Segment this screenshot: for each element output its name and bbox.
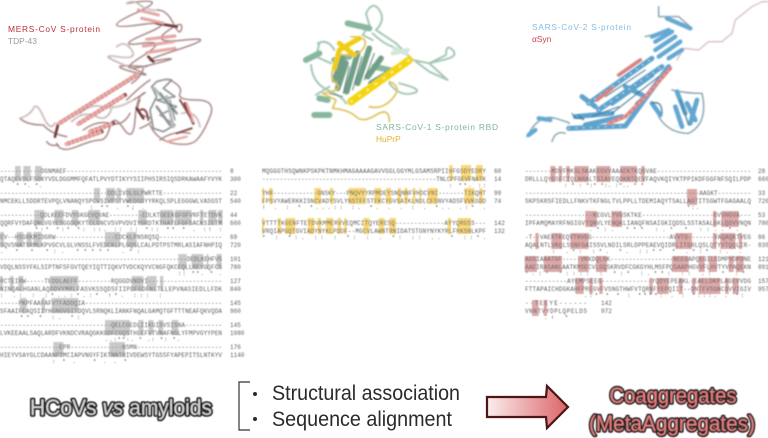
sequence alignment: MERS-CoV S-protein vs TDP-43: 145 <box>230 322 241 329</box>
sequence alignment: MERS-CoV S-protein vs TDP-43: SFAAIFEAQSIIYHGNGVGITDQVLSRNQKLIANKFNQALGAMQTGFTTTNEAFQKVQDA <box>0 308 222 315</box>
sequence alignment: SARS-CoV-2 S-protein vs alpha-synuclein: 86 <box>758 234 766 241</box>
sequence alignment: MERS-CoV S-protein vs TDP-43: : ** . *; . <box>90 205 145 211</box>
sequence alignment: SARS-CoV-1 S-protein RBD vs HuPrP: * : *:. :: : *: : . *: :: .. * ::*. <box>262 235 486 241</box>
sequence alignment: MERS-CoV S-protein vs TDP-43: ** * :. *: <box>20 315 80 321</box>
sequence alignment: SARS-CoV-1 S-protein RBD vs HuPrP: 99 <box>494 190 502 197</box>
sequence alignment: SARS-CoV-2 S-protein vs alpha-synuclein: --TEEYE------ <box>525 300 587 307</box>
sequence alignment: MERS-CoV S-protein vs TDP-43: . * * *:. ***** .*: <box>0 249 140 255</box>
sequence alignment: SARS-CoV-2 S-protein vs alpha-synuclein: -------MDVFMKGLSKAKEGVVAAAEKTKQGVAE------------------------- <box>525 168 751 175</box>
sequence alignment: MERS-CoV S-protein vs TDP-43: HIEYVSAYGLCDAANPTMCIAPVNGYFIKTNNTRIVDEWSYTGSSFYAPEPITSLNTKYV <box>0 352 222 359</box>
sequence alignment: SARS-CoV-2 S-protein vs alpha-synuclein: FTTAPAICHDGKAHFPREGVFVSNGTHWFVTQRNFYEPQIIT--DNTFVSGNCDVVIGIV <box>525 286 751 293</box>
sequence alignment: MERS-CoV S-protein vs TDP-43: 540 <box>230 198 241 205</box>
sequence alignment: SARS-CoV-2 S-protein vs alpha-synuclein: 972 <box>601 308 612 315</box>
sequence alignment: SARS-CoV-2 S-protein vs alpha-synuclein: *.:* *:::: : *:* :.**: :: .: * :* <box>525 271 745 277</box>
sequence alignment: MERS-CoV S-protein vs TDP-43: * *. *. <box>16 183 42 189</box>
sequence alignment: SARS-CoV-2 S-protein vs alpha-synuclein: -----------AYEMPSEEG-------------YQDYEPEAKL-EAELDKPLAGEVVDG <box>525 278 751 285</box>
sequence alignment: SARS-CoV-2 S-protein vs alpha-synuclein: : .*: :*. *. ::** * .*:* :. . <box>552 249 742 255</box>
sequence alignment: MERS-CoV S-protein vs TDP-43: -----------QDLKEEFDVYGKGEVQVAE---------EDLKTGEEKGFGFVRFTETDVK <box>0 212 222 219</box>
sequence alignment: SARS-CoV-2 S-protein vs alpha-synuclein: .! * <box>544 315 568 321</box>
sequence alignment: SARS-CoV-2 S-protein vs alpha-synuclein: -T--VAEKTKEQVTNVGG---------------------AVVTG-------VAQAQKTVEG <box>525 234 751 241</box>
sequence alignment: SARS-CoV-1 S-protein RBD vs HuPrP <box>262 165 505 241</box>
sequence alignment: SARS-CoV-1 S-protein RBD vs HuPrP: 14 <box>494 176 502 183</box>
sequence alignment: SARS-CoV-1 S-protein RBD vs HuPrP: MQGGGTHSQWNKPSKPKTNMKHMAGAAAAGAVVGGLGGYMLGSAMSRPIIHFGSDYEDRY <box>262 168 486 175</box>
sequence alignment: SARS-CoV-1 S-protein RBD vs HuPrP: ! . : * *...:: :. *. . . : . *.. .:* . <box>262 205 486 211</box>
sequence alignment: MERS-CoV S-protein vs TDP-43: ..:**:. * .: *: *. <box>105 337 180 343</box>
sequence alignment: MERS-CoV S-protein vs TDP-43: 720 <box>230 242 241 249</box>
sequence alignment: SARS-CoV-2 S-protein vs alpha-synuclein: 53 <box>758 212 766 219</box>
label: TDP-43: TDP-43 <box>8 36 37 46</box>
sequence alignment: SARS-CoV-1 S-protein RBD vs HuPrP: 74 <box>494 198 502 205</box>
sequence alignment: MERS-CoV S-protein vs TDP-43: 960 <box>230 308 241 315</box>
sequence alignment: MERS-CoV S-protein vs TDP-43: LVKEEAALSAQLARDFVKNDCVRAQGKKGDFCGQSTHLEFVTVNAFNGLYFMPVGYYPEN <box>0 330 222 337</box>
label: SARS-CoV-1 S-protein RBD: SARS-CoV-1 S-protein RBD <box>376 122 498 132</box>
sequence alignment: SARS-CoV-2 S-protein vs alpha-synuclein: AQALNTLVKQLSSNFGAISSVLNDILSRLDPPEAEVQIDRLITGRLQSLQTYVTQQLIR- <box>525 242 751 249</box>
sequence alignment: MERS-CoV S-protein vs TDP-43: QQRFVYDAFQNLVGYESGGDQKYTCLGNCVSVPVDVIYGRDTKTHATLFGFSACKSIETM <box>0 220 222 227</box>
sequence alignment: MERS-CoV S-protein vs TDP-43: 780 <box>230 264 241 271</box>
sequence alignment: MERS-CoV S-protein vs TDP-43: SQVSNATSRMLKPVGCVLGLVNSSLFVEDCKLPLGQSLCALPDTPSTMRLASIAFNHPIQ <box>0 242 222 249</box>
sequence alignment: SARS-CoV-2 S-protein vs alpha-synuclein: .:* * * : ****: . : *:::. . *: <box>584 293 744 299</box>
sequence alignment: SARS-CoV-2 S-protein vs alpha-synuclein: VNNTVYDPLQPELDS <box>525 308 587 315</box>
result text: Coaggregates (MetaAggregates) <box>589 383 755 436</box>
sequence alignment: SARS-CoV-2 S-protein vs alpha-synuclein: AAEIRASANLAATKMSECVLGQSKRVDFCGKGYHLMSFPQSAAPHGVVFLHVTYVPAQEKN <box>525 264 751 271</box>
bullet list: methods: Sequence alignment <box>272 408 452 431</box>
sequence alignment: MERS-CoV S-protein vs TDP-43: 1140 <box>230 352 245 359</box>
sequence alignment: SARS-CoV-1 S-protein RBD vs HuPrP: 132 <box>494 228 505 235</box>
sequence alignment: SARS-CoV-2 S-protein vs alpha-synuclein: -----------------------------------------------AAGKT--------- <box>525 190 751 197</box>
sequence alignment: MERS-CoV S-protein vs TDP-43: 101 <box>230 256 241 263</box>
sequence alignment: MERS-CoV S-protein vs TDP-43: 145 <box>230 300 241 307</box>
sequence alignment: MERS-CoV S-protein vs TDP-43: :*. *..* <box>52 359 127 365</box>
sequence alignment: MERS-CoV S-protein vs TDP-43: 300 <box>230 176 241 183</box>
label: SARS-CoV-2 S-protein: SARS-CoV-2 S-protein <box>532 22 631 32</box>
sequence alignment: MERS-CoV S-protein vs TDP-43 <box>0 166 245 365</box>
sequence alignment: MERS-CoV S-protein vs TDP-43: VDQLNSSYFKLSIPTNFSFGVTQEYIQTTIQKVTVDCKQYVCNGFQKCEQLLREYGQFCS <box>0 264 222 271</box>
sequence alignment: MERS-CoV S-protein vs TDP-43: 660 <box>230 220 241 227</box>
sequence alignment: MERS-CoV S-protein vs TDP-43: : .: : :*..:*.:* !*. ::: : <box>0 293 162 299</box>
sequence alignment: SARS-CoV-2 S-protein vs alpha-synuclein: DRLLLQYGSFCTQLNRALTGIAVEQDKNTQEVFAQVKQIYKTPPIKDFGGFNFSQILPDP <box>525 176 751 183</box>
sequence alignment: SARS-CoV-2 S-protein vs alpha-synuclein: AGSIAAATGF-----VKKDQLGK-----------------NEEGAPQEGILEDMPVDPDNE <box>525 256 751 263</box>
sequence alignment: MERS-CoV S-protein vs TDP-43: EV--HSGRKMIDGRW----------------CDCKLPNSRQSQ----------------- <box>0 234 222 241</box>
sequence alignment: SARS-CoV-1 S-protein RBD vs HuPrP: 60 <box>494 168 502 175</box>
sequence alignment: MERS-CoV S-protein vs TDP-43: -----------------------------DDLIVDLGLPWRTTE---------------- <box>0 190 222 197</box>
sequence alignment: MERS-CoV S-protein vs TDP-43: NINQALHGANLAQDDVYMRLFASVKSSQDSFIIPDFGDFNLTLLEPVNASIEDLLFDK <box>0 286 222 293</box>
protein structure: SARS-CoV-2 S-protein with alpha-synuclein <box>527 2 768 142</box>
sequence alignment: MERS-CoV S-protein vs TDP-43: 840 <box>230 286 241 293</box>
sequence alignment: MERS-CoV S-protein vs TDP-43: RCTEIRW-----TEDDLAEFF---------RQGGDVNDVI-------------------- <box>0 278 222 285</box>
protein structure: SARS-CoV-1 S-protein RBD with HuPrP <box>306 6 455 122</box>
sequence alignment: SARS-CoV-2 S-protein vs alpha-synuclein: 28 <box>758 168 766 175</box>
bracket <box>239 382 250 430</box>
label: MERS-CoV S-protein: MERS-CoV S-protein <box>8 24 100 34</box>
sequence alignment: MERS-CoV S-protein vs TDP-43: ------------------------------QELCGEDLIIKGISVSISNA---------- <box>0 322 222 329</box>
protein structure: MERS-CoV S-protein with TDP-43 <box>20 1 212 149</box>
left title: HCoVs vs amyloids: HCoVs vs amyloids <box>30 395 212 420</box>
sequence alignment: SARS-CoV-2 S-protein vs alpha-synuclein: 142 <box>601 300 612 307</box>
sequence alignment: MERS-CoV S-protein vs TDP-43: :: **. * . <box>178 271 222 277</box>
result text: Coaggregates (MetaAggregates): Coaggregates <box>610 383 736 408</box>
sequence alignment: MERS-CoV S-protein vs TDP-43: *:* *:* *: ::. :: :: *:: ** * . :! : <box>35 227 222 233</box>
sequence alignment: SARS-CoV-1 S-protein RBD vs HuPrP: YHR------------GNSKY---PNQVYYRPMDEYSNQNNFVHDCVNI-------TIKQHT <box>262 190 486 197</box>
bullet list: methods: Structural association <box>272 382 460 405</box>
sequence alignment: MERS-CoV S-protein vs TDP-43: -----PKPFAAFAFVTFADDQIA------------------------------------- <box>0 300 222 307</box>
sequence alignment: SARS-CoV-2 S-protein vs alpha-synuclein: SKPSKRSFIEDLLFNKVTKFNGLTVLPPLLTDEMIAQYTSALLAGTITSGWTFGAGAALQ <box>525 198 751 205</box>
sequence alignment: SARS-CoV-1 S-protein RBD vs HuPrP: VRQIAPGQTGVIADYNYKLPDDF--MGCVLAWNTRNIDATSTGNYNYKYRLFRKSNLKPF <box>262 228 486 235</box>
sequence alignment: MERS-CoV S-protein vs TDP-43: 22 <box>230 190 238 197</box>
sequence alignment: MERS-CoV S-protein vs TDP-43: 69 <box>230 234 238 241</box>
sequence alignment: SARS-CoV-2 S-protein vs alpha-synuclein: : * : *:* *:. :*.. * * <box>564 183 644 189</box>
sequence alignment: SARS-CoV-2 S-protein vs alpha-synuclein: *:. <box>687 205 699 211</box>
sequence alignment: MERS-CoV S-protein vs TDP-43: 176 <box>230 344 241 351</box>
sequence alignment: SARS-CoV-2 S-protein vs alpha-synuclein <box>525 166 768 321</box>
label: alpha-synuclein: αSyn <box>532 34 552 44</box>
sequence alignment: SARS-CoV-1 S-protein RBD vs HuPrP: : **. :: <box>449 183 486 189</box>
sequence alignment: SARS-CoV-1 S-protein RBD vs HuPrP: -------------------------------------------------TNLCPFGEVFNATK <box>262 176 486 183</box>
sequence alignment: SARS-CoV-2 S-protein vs alpha-synuclein: ------------------KEGVLYVGSKTKE-------------------GVVHGVA--- <box>525 212 751 219</box>
sequence alignment: SARS-CoV-1 S-protein RBD vs HuPrP: VTTTTKGENFTETDVKMMERVVEQMCITQYERESQ-------------AYYQRGSS--- <box>262 220 486 227</box>
sequence alignment: MERS-CoV S-protein vs TDP-43: 44 <box>230 212 238 219</box>
sequence alignment: SARS-CoV-2 S-protein vs alpha-synuclein: IPFAMQMAYRFNGIGVTQNVLYENQKLIANQFNSAIGKIQDSLSSTASALGKLQDVVNQN <box>525 220 751 227</box>
sequence alignment: SARS-CoV-1 S-protein RBD vs HuPrP: FPSVYAWERKKISNCVADYSVLYNSTFFSTFKCYGVSATKLNDLCFSNVYADSFVVKGDD <box>262 198 486 205</box>
sequence alignment: MERS-CoV S-protein vs TDP-43: 8 <box>230 168 234 175</box>
sequence alignment: MERS-CoV S-protein vs TDP-43: ----------------EPR--------------NSMN----------------------- <box>0 344 222 351</box>
sequence alignment: MERS-CoV S-protein vs TDP-43: 127 <box>230 278 241 285</box>
sequence alignment: MERS-CoV S-protein vs TDP-43: 1080 <box>230 330 245 337</box>
sequence alignment: SARS-CoV-2 S-protein vs alpha-synuclein: 33 <box>758 190 766 197</box>
label: HuPrP: HuPrP <box>376 134 401 144</box>
sequence alignment: MERS-CoV S-protein vs TDP-43: NMCEKLLSDDRTEVPQLVNANQYSPCVSIVPSTVWEDGDYYRKQLSPLEGGGWLVASGST <box>0 198 222 205</box>
sequence alignment: MERS-CoV S-protein vs TDP-43: QTAQEVDLFSDKYVDLDGGMMFQFATLPVYDTIKYYSIIPHSIRSIQSDRKAWAAFYVYK <box>0 176 222 183</box>
sequence alignment: MERS-CoV S-protein vs TDP-43: -----------------------------------------------------DEDLKEHFVS <box>0 256 222 263</box>
arrow <box>487 386 568 428</box>
sequence alignment: SARS-CoV-2 S-protein vs alpha-synuclein: .*:. *** :.* * ::..*. <box>589 227 739 233</box>
sequence alignment: MERS-CoV S-protein vs TDP-43: -----------DGNMAEF------------------------------------------ <box>0 168 222 175</box>
bullet list: methods <box>253 382 460 431</box>
sequence alignment: SARS-CoV-1 S-protein RBD vs HuPrP: 142 <box>494 220 505 227</box>
result text: Coaggregates (MetaAggregates): (MetaAggregates) <box>589 411 755 436</box>
